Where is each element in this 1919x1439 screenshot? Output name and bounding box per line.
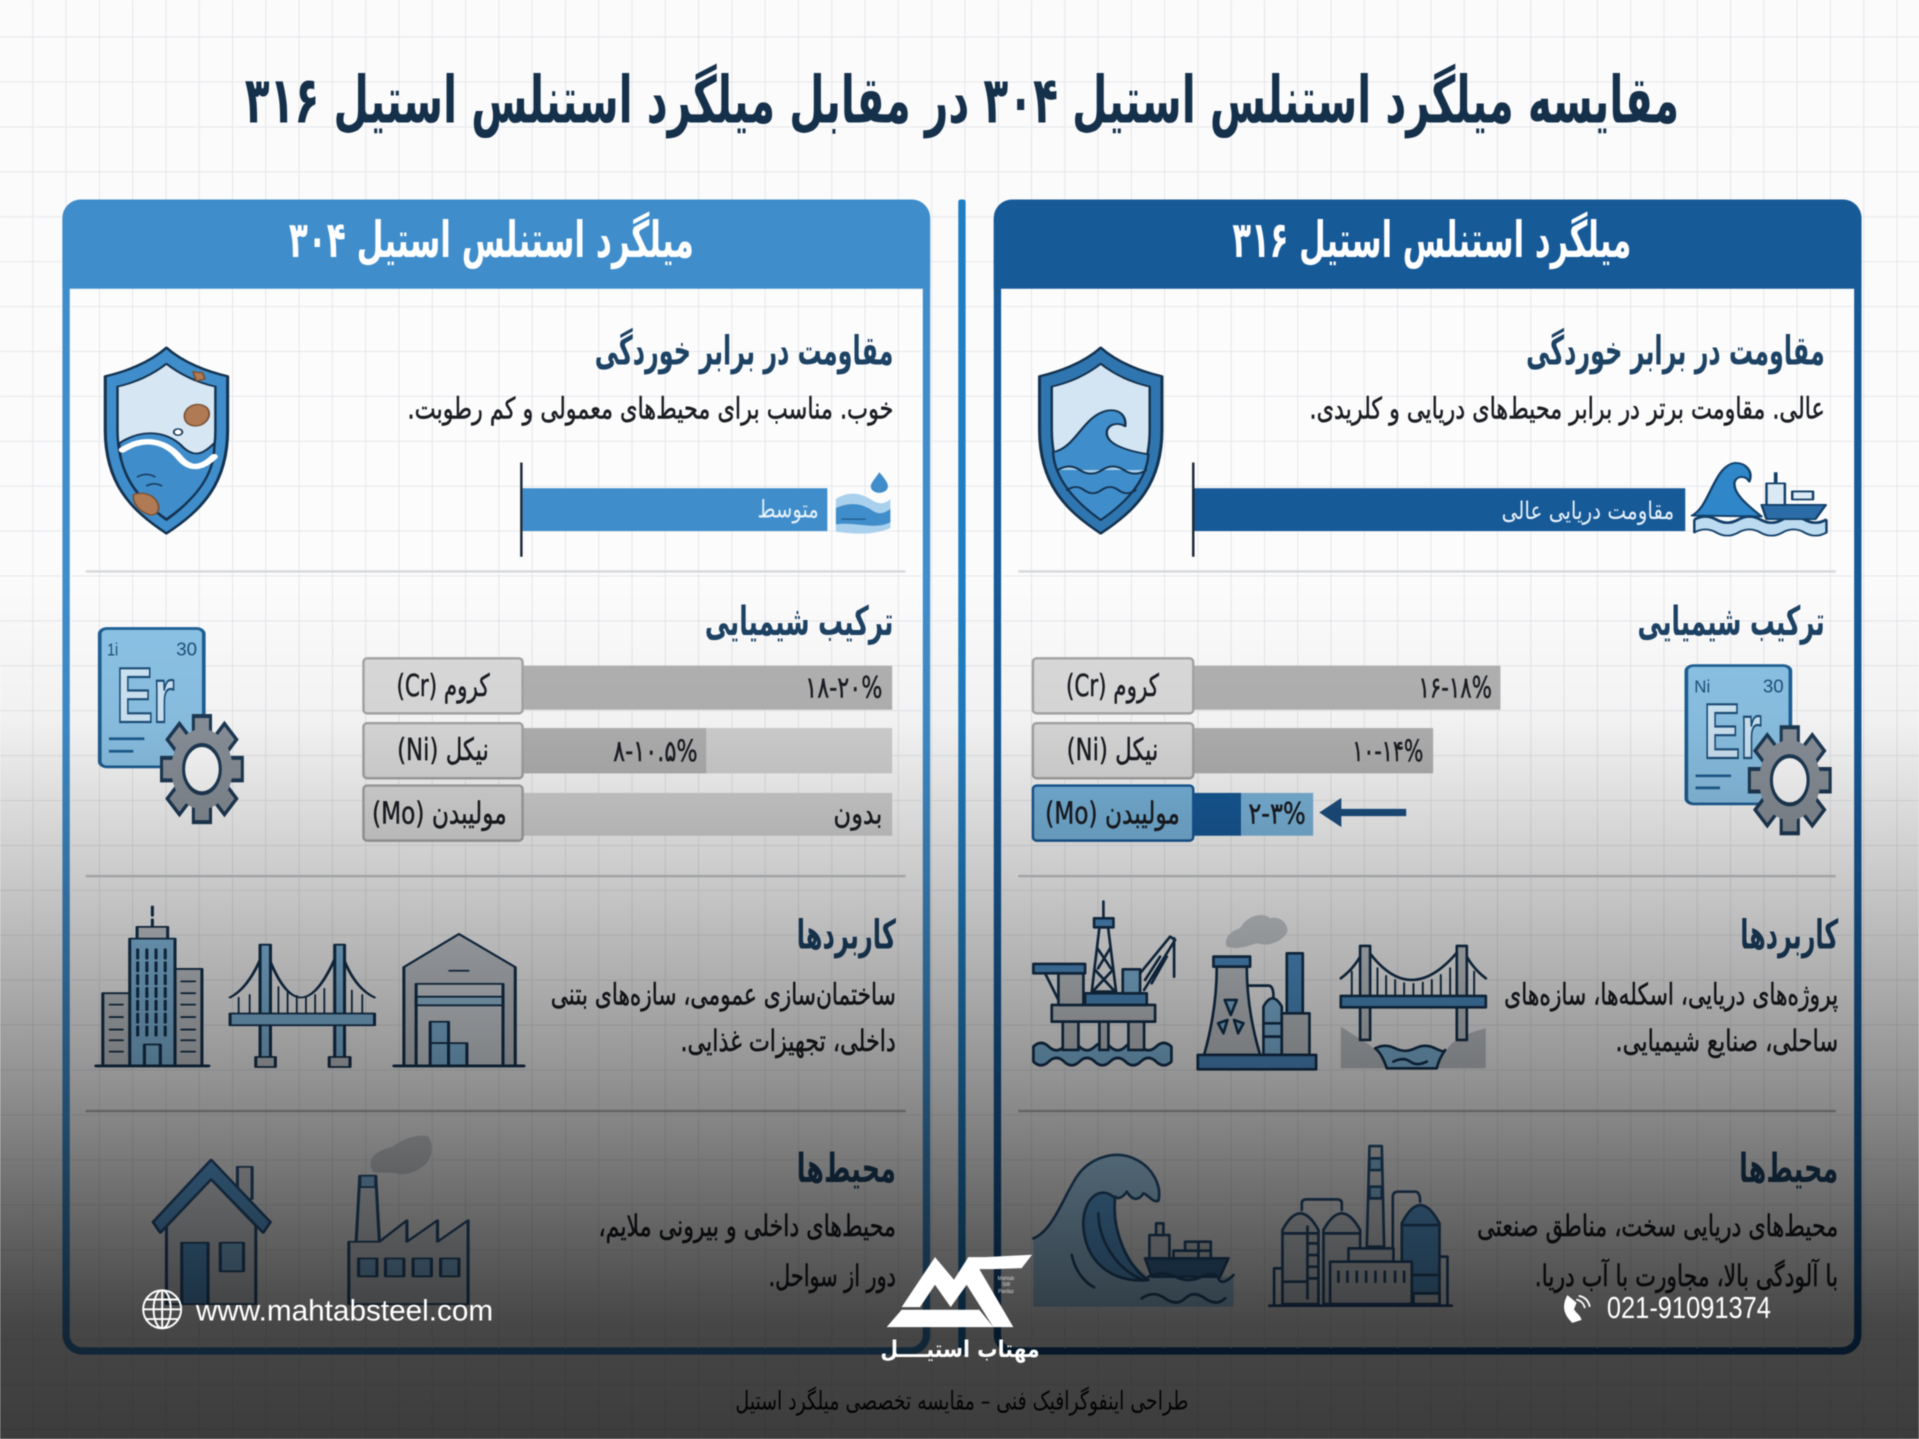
icon: element card with gear: Er	[116, 651, 174, 739]
website address: www.mahtabsteel.com	[195, 1294, 493, 1327]
icon: office buildings	[97, 907, 208, 1066]
row: chromium 304	[363, 658, 892, 713]
phone number: 021-91091374	[1607, 1291, 1771, 1325]
row: chromium 316: ۱۶-۱۸%	[1418, 670, 1492, 704]
row: chromium 316: کروم (Cr)	[1066, 669, 1159, 704]
panel header	[994, 199, 1861, 289]
heading: applications: کاربردها	[1740, 911, 1839, 958]
center divider bar	[958, 199, 966, 1355]
row: chromium 316	[1033, 658, 1500, 713]
icon: element card with gear: 1i	[107, 640, 118, 660]
heading: environments: محیط‌ها	[1739, 1145, 1838, 1192]
environments description: محیط‌های داخلی و بیرونی ملایم،	[598, 1209, 896, 1244]
environments description	[1477, 1209, 1838, 1293]
logo	[880, 1255, 1040, 1363]
panel: stainless 304	[62, 199, 930, 1351]
divider	[86, 570, 906, 573]
row: nickel 304: نیکل (Ni)	[397, 733, 489, 768]
applications description	[551, 978, 896, 1058]
row: nickel 304	[363, 723, 892, 778]
icon: element card with gear: Er	[1703, 687, 1762, 775]
icon: element card with gear	[1686, 666, 1830, 833]
environments description: دور از سواحل.	[769, 1259, 896, 1293]
logo: Mahtab	[998, 1276, 1015, 1282]
icon: house	[153, 1160, 270, 1304]
row: nickel 316: ۱۰-۱۴%	[1352, 734, 1423, 768]
icon: bridge over gorge	[1341, 946, 1486, 1068]
row: molybdenum 316	[1033, 786, 1313, 841]
moderate resistance bar	[520, 463, 827, 557]
moderate resistance bar: متوسط	[758, 495, 819, 524]
row: chromium 304: کروم (Cr)	[397, 669, 490, 704]
row: nickel 304: ۸-۱۰.۵%	[613, 734, 698, 768]
row: nickel 316	[1033, 723, 1433, 778]
credit line: طراحی اینفوگرافیک فنی – مقایسه تخصصی میلگرد استیل	[736, 1386, 1188, 1417]
icon: element card with gear: Ni	[1694, 676, 1710, 696]
row: molybdenum 304	[363, 786, 892, 841]
corrosion description: خوب. مناسب برای محیط‌های معمولی و کم رطوبت.	[408, 391, 893, 426]
heading: chemical composition: ترکیب شیمیایی	[705, 598, 893, 645]
header text 304: میلگرد استنلس استیل ۳۰۴	[289, 210, 694, 270]
header text 316: میلگرد استنلس استیل ۳۱۶	[1232, 210, 1631, 270]
applications description: ساحلی، صنایع شیمیایی.	[1615, 1024, 1838, 1058]
divider	[1018, 570, 1836, 573]
icon: element card with gear: 30	[1763, 676, 1784, 696]
row: chromium 304: ۱۸-۲۰%	[805, 670, 882, 704]
icon: element card with gear: 30	[176, 639, 197, 660]
heading: corrosion resistance: مقاومت در برابر خوردگی	[595, 328, 893, 375]
heading: applications: کاربردها	[797, 911, 896, 958]
row: molybdenum 304: بدون	[833, 797, 882, 831]
logo: Pardaz	[998, 1289, 1014, 1295]
icon: wave shield	[1040, 348, 1162, 533]
icon: wave and ship	[1692, 463, 1826, 536]
applications description: داخلی، تجهیزات غذایی.	[680, 1024, 896, 1058]
logo: مهتاب استیــــل	[880, 1335, 1040, 1363]
panel frame	[66, 203, 926, 1351]
panel: stainless 316	[994, 199, 1861, 1351]
icon: refinery	[1269, 1146, 1452, 1306]
high marine resistance bar	[1192, 463, 1685, 557]
logo: Still	[1002, 1282, 1010, 1288]
row: molybdenum 304: مولیبدن (Mo)	[372, 797, 507, 832]
divider	[86, 875, 906, 877]
divider	[86, 1110, 906, 1112]
environments description	[598, 1209, 896, 1293]
panel frame	[997, 203, 1858, 1351]
icon: suspension bridge	[230, 945, 374, 1067]
panel header	[62, 199, 930, 289]
icon: rusty shield	[105, 348, 228, 533]
icon: water	[836, 472, 890, 534]
icon: phone	[1565, 1296, 1590, 1322]
row: nickel 316: نیکل (Ni)	[1067, 733, 1158, 768]
website footer	[143, 1290, 493, 1328]
arrow	[1319, 798, 1406, 827]
icon: factory	[349, 1136, 468, 1304]
divider	[1018, 1110, 1836, 1112]
icon: offshore platform	[1033, 902, 1175, 1065]
icon: nuclear plant	[1198, 915, 1316, 1069]
divider	[1018, 875, 1836, 877]
applications description	[1504, 978, 1838, 1058]
icon: warehouse	[395, 934, 523, 1066]
icon: element card with gear	[100, 628, 242, 822]
icon: globe	[143, 1290, 181, 1328]
row: molybdenum 316: مولیبدن (Mo)	[1045, 797, 1180, 832]
row: molybdenum 316: ۲-۳%	[1248, 797, 1306, 831]
icon: wave and cargo ship	[1033, 1155, 1233, 1307]
high marine resistance bar: مقاومت دریایی عالی	[1502, 496, 1674, 525]
applications description: ساختمان‌سازی عمومی، سازه‌های بتنی	[551, 978, 896, 1012]
phone footer	[1565, 1291, 1771, 1325]
heading: environments: محیط‌ها	[797, 1145, 896, 1192]
